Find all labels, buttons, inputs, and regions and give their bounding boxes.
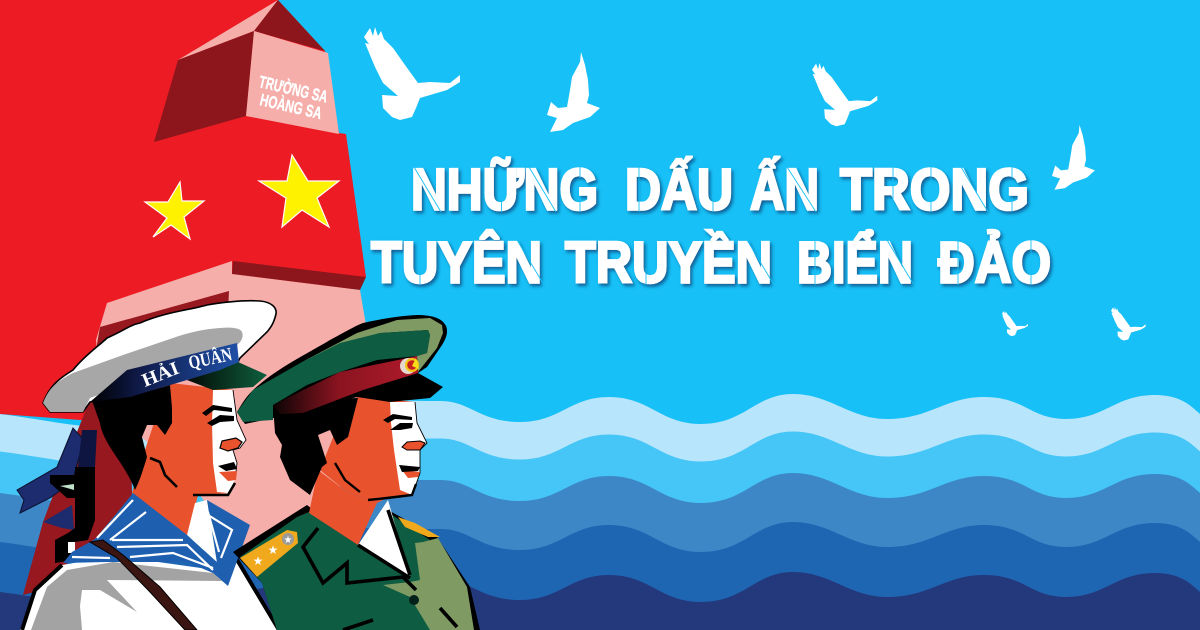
- bird 6: [1111, 307, 1146, 340]
- button: [409, 595, 419, 605]
- white face highlight: [212, 390, 246, 493]
- left epaulet: ★: [253, 554, 263, 568]
- title: TRUYỀN: [565, 230, 772, 296]
- white neck: [187, 500, 218, 563]
- sailor hat: HẢI: [139, 358, 182, 392]
- red flag field: [0, 0, 366, 420]
- bird 2: [547, 52, 600, 132]
- tower roof light side: [178, 0, 278, 60]
- tower dark left face: [154, 31, 254, 142]
- sailor shirt: [20, 553, 280, 630]
- soldier figure: [233, 315, 480, 630]
- bird 3: [812, 63, 877, 126]
- hair: [273, 398, 358, 495]
- plaque text: HOÀNG SA: [258, 90, 324, 123]
- left epaulet: [240, 530, 298, 577]
- sea waves: [0, 394, 1200, 630]
- sailor figure: [17, 301, 280, 630]
- uniform dark green: [240, 512, 443, 630]
- nose and lips: [402, 441, 425, 450]
- jaw and neck lines: [335, 463, 416, 500]
- tower base pink: [96, 261, 366, 570]
- eye, brow and mouth: [383, 414, 420, 472]
- bird 5: [1002, 311, 1028, 336]
- jaw and neck lines: [150, 458, 235, 495]
- title: ĐẢO: [938, 230, 1051, 296]
- shirt grey shading: [31, 562, 222, 630]
- shoulder strap: [90, 540, 197, 630]
- bird 4: [1052, 125, 1095, 190]
- tower roof dark side: [254, 0, 325, 51]
- tower base band: [232, 261, 366, 290]
- sailor hat: [43, 301, 276, 412]
- title: DẤU: [625, 158, 733, 222]
- face: [320, 397, 427, 500]
- title: ẤN: [750, 158, 819, 222]
- bird 1: [364, 27, 460, 120]
- title: TUYÊN: [371, 230, 542, 296]
- shirt outline: [22, 553, 279, 630]
- face profile line: [414, 402, 427, 490]
- rifle and ribbons: [17, 428, 97, 563]
- neck and face: [132, 383, 246, 535]
- uniform khaki: [383, 538, 474, 630]
- title: TRONG: [840, 158, 1029, 222]
- nose and lips: [220, 438, 242, 451]
- tower front plaque: [246, 31, 339, 134]
- white face highlight: [390, 402, 427, 495]
- left epaulet: ★: [284, 535, 293, 546]
- sailor hat: QUÂN: [186, 343, 234, 374]
- star small: [145, 182, 204, 239]
- right epaulet: [398, 517, 440, 537]
- sailor collar: [63, 493, 250, 586]
- plaque text: [257, 72, 330, 123]
- soldier cap: [237, 315, 447, 424]
- star large: [259, 155, 339, 227]
- sovereignty marker tower: [23, 0, 366, 595]
- uniform: [233, 505, 480, 630]
- collar lines: [303, 510, 457, 630]
- neck: [309, 470, 387, 545]
- plaque text: TRƯỜNG SA: [257, 72, 330, 107]
- title: NHỮNG: [411, 158, 598, 222]
- birds: [364, 27, 1146, 340]
- left epaulet: ★: [268, 543, 278, 557]
- hair: [90, 380, 187, 490]
- eye, brow and mouth: [202, 405, 237, 471]
- tower base shadow: [23, 291, 229, 595]
- face profile line: [233, 390, 246, 480]
- title: [371, 158, 1051, 296]
- white shirt: [358, 500, 410, 577]
- title: BIỂN: [797, 230, 913, 296]
